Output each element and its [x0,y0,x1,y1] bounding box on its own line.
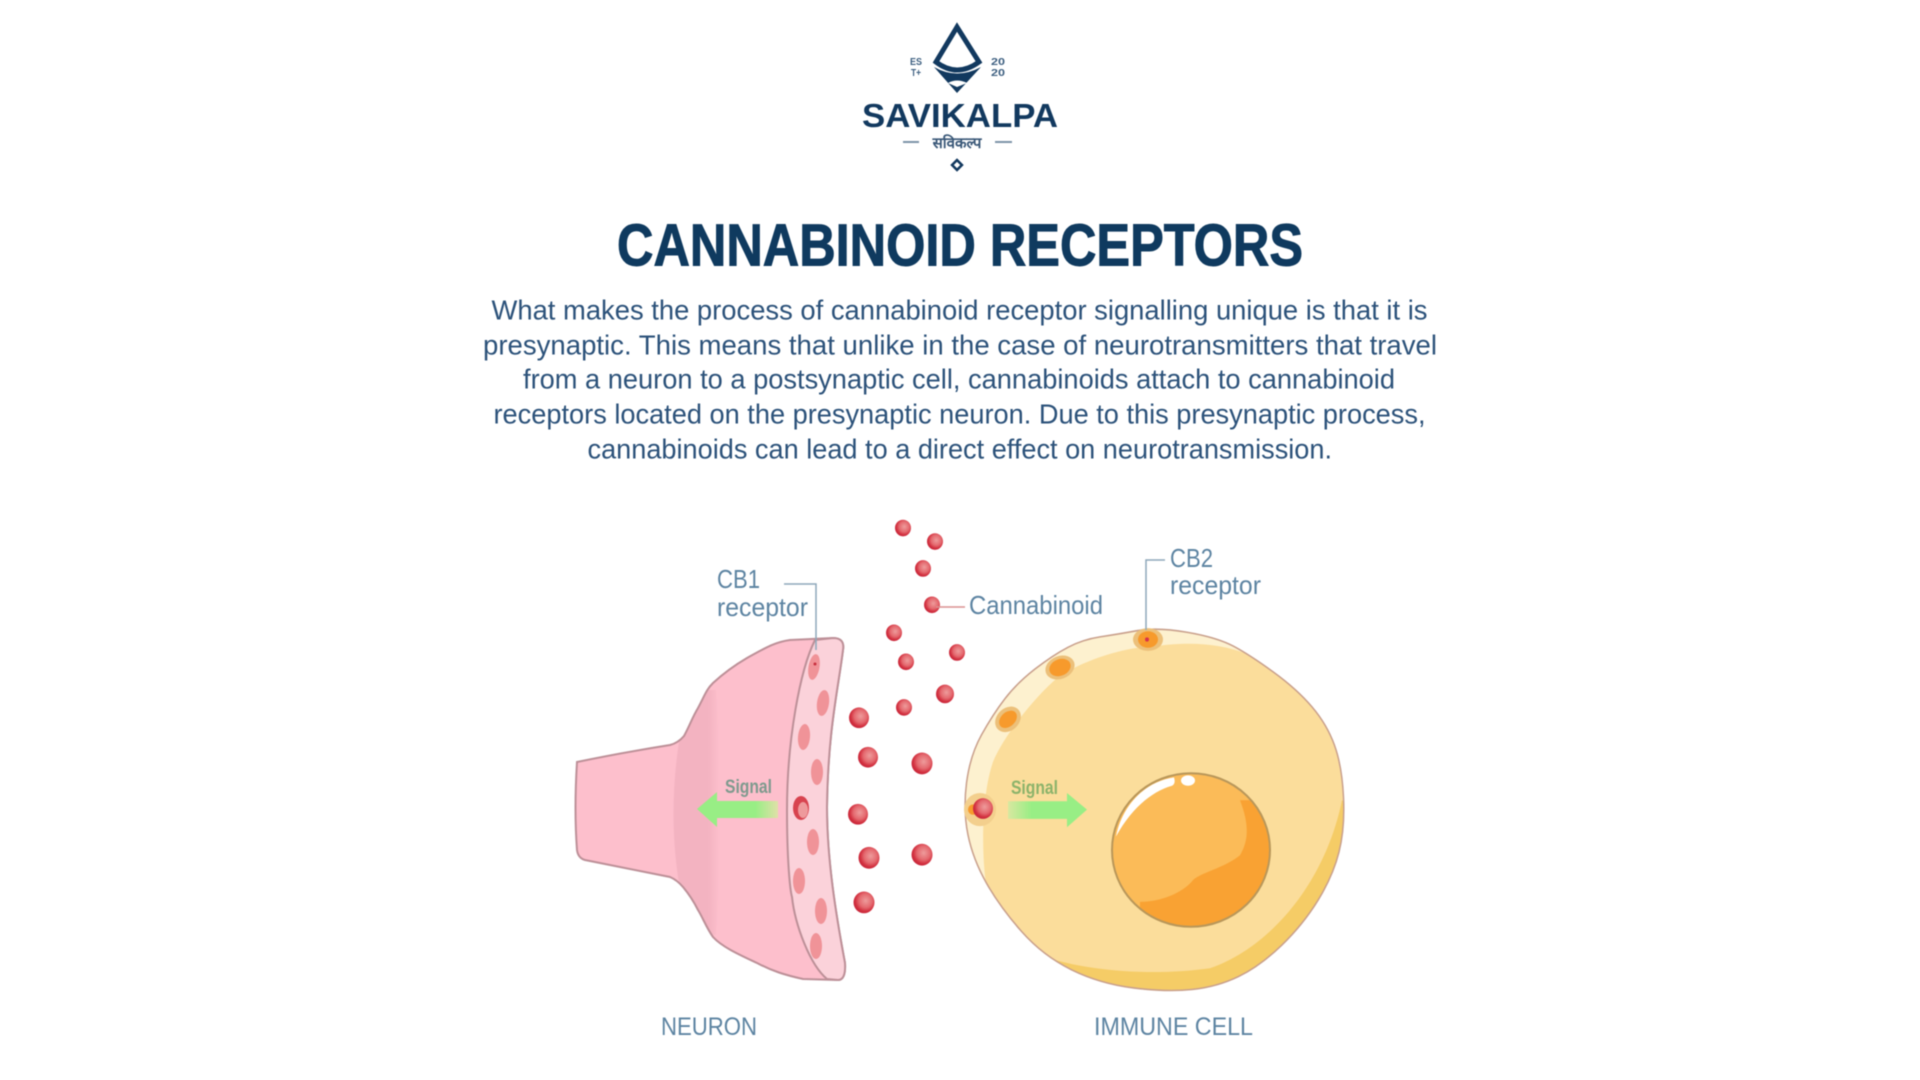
label: CB2 receptor: CB2 [1170,543,1213,573]
logo year bottom: 20 [991,68,1006,79]
neuron darker band [674,690,712,931]
text block: intro paragraph: from a neuron to a postsynaptic cell, cannabinoids attach to cannabinoid [523,364,1395,394]
logo small diamond [952,160,962,170]
icon: logo drop emblem [934,27,981,93]
logo est text left second line: T+ [911,68,921,79]
logo est text left: ES [910,57,922,68]
panel: cannabinoid molecules [848,520,965,913]
arrow: neuron signal [697,792,778,827]
logo wordmark: SAVIKALPA [862,97,1058,134]
neuron receptors [793,653,831,959]
logo dash left [903,141,919,143]
label: CB2 receptor [1146,543,1261,630]
text block: intro paragraph [483,294,1437,464]
panel: neuron illustration [576,638,845,980]
neuron outline [576,638,845,980]
label: neuron: NEURON [661,1013,757,1041]
cell cytoplasm [982,643,1344,972]
cell shadow [1057,800,1344,990]
panel: immune cell illustration [963,628,1346,992]
label: cannabinoid: Cannabinoid [969,590,1103,620]
label: CB1 receptor [717,564,816,650]
text block: intro paragraph: What makes the process of cannabinoid receptor signalling unique is that it is [492,294,1428,326]
title: CANNABINOID RECEPTORS [617,212,1303,278]
logo year top: 20 [991,57,1006,68]
cell receptors [964,628,1163,826]
label: CB1 receptor: receptor [717,592,808,622]
text block: intro paragraph: cannabinoids can lead to a direct effect on neurotransmission. [588,434,1332,464]
text block: intro paragraph: receptors located on the presynaptic neuron. Due to this presynaptic process, [494,398,1426,430]
logo hindi name: सविकल्प [932,134,983,152]
cell outline [965,629,1344,990]
label: CB1 receptor: CB1 [717,564,760,594]
label: immune cell: IMMUNE CELL [1094,1013,1253,1041]
label: CB2 receptor: receptor [1170,570,1261,600]
signal label cell: Signal [1011,777,1058,799]
logo: Savikalpa [862,27,1058,170]
neuron body [576,638,845,980]
neuron membrane [787,638,845,980]
signal label neuron: Signal [725,777,772,798]
logo dash right [995,141,1012,143]
nucleus [1110,772,1272,928]
arrow: cell signal [1008,793,1087,827]
text block: intro paragraph: presynaptic. This means that unlike in the case of neurotransmitters that travel [483,330,1437,360]
cell body [965,629,1344,990]
